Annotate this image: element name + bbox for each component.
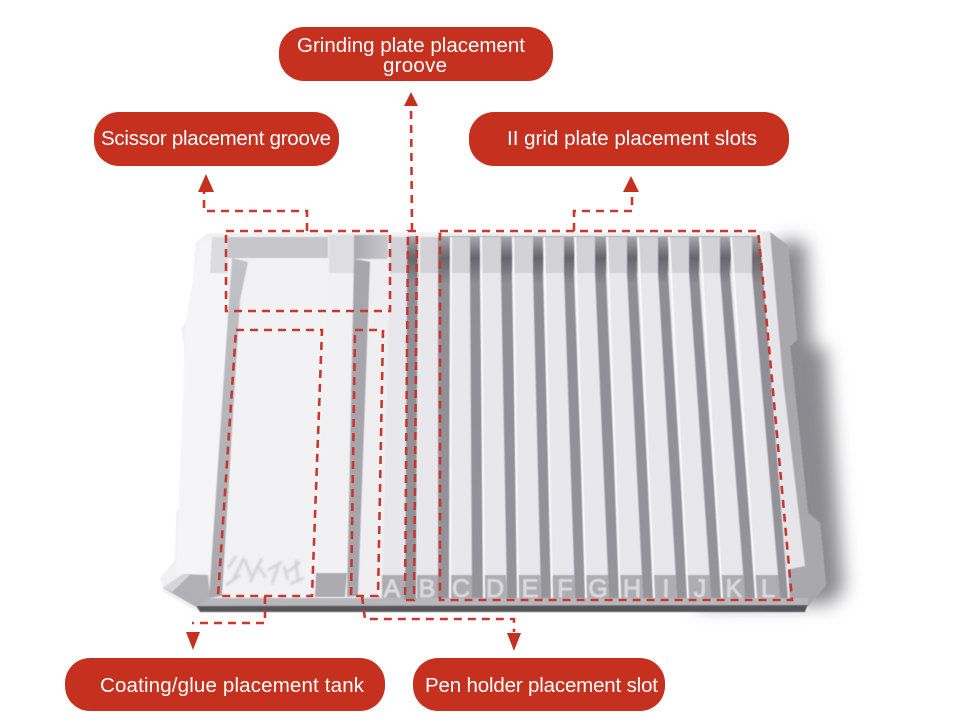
second groove dark wall xyxy=(347,259,372,597)
callout: pen holder placement slot xyxy=(351,330,665,711)
rib E xyxy=(512,273,541,598)
pill xyxy=(94,112,339,166)
grinding groove dark slot xyxy=(404,236,418,600)
leader line xyxy=(574,194,632,231)
white blocks A B C ribs xyxy=(382,237,780,598)
drop shadow of tray xyxy=(700,240,844,606)
rib B xyxy=(417,273,438,598)
tank floor bottom strip xyxy=(315,573,347,597)
slot letters: L xyxy=(761,575,775,603)
callout: II grid plate placement slots xyxy=(440,112,792,600)
pill xyxy=(279,27,553,81)
leader line xyxy=(362,596,514,632)
dashed region xyxy=(440,231,792,600)
tray xyxy=(160,231,826,612)
arrowhead xyxy=(623,176,639,192)
tray outer body xyxy=(160,231,826,611)
label: Scissor placement groove xyxy=(101,127,331,150)
pill xyxy=(413,658,665,711)
slot letters: F xyxy=(557,575,573,603)
slot letters: B xyxy=(419,575,435,603)
left groove wall xyxy=(209,258,248,598)
dashed region xyxy=(226,231,390,311)
bottom dark edge xyxy=(196,605,808,612)
divider body xyxy=(316,273,354,573)
second groove back wall xyxy=(354,235,388,259)
label: Pen holder placement slot xyxy=(425,674,658,697)
slot letters: K xyxy=(726,575,743,603)
leader line xyxy=(192,596,265,623)
slot letters: H xyxy=(623,575,641,603)
dashed region xyxy=(218,330,322,596)
arrowhead xyxy=(186,632,200,650)
scissor groove back wall xyxy=(228,237,328,258)
slot letters: A xyxy=(384,575,401,603)
slot letters xyxy=(384,575,775,603)
embossed logo mark xyxy=(226,556,304,585)
slot letters: E xyxy=(522,575,538,603)
slot letters: C xyxy=(452,575,470,603)
leader line xyxy=(204,192,307,231)
rib L xyxy=(730,273,780,598)
right side wall xyxy=(770,232,826,606)
pen holder floor xyxy=(358,258,390,597)
rib D xyxy=(480,273,507,598)
rib A xyxy=(382,273,407,598)
rib K xyxy=(699,273,745,598)
left frame strip xyxy=(176,240,232,575)
dashed region xyxy=(405,231,417,600)
grid slots dark base xyxy=(438,236,788,598)
pill xyxy=(469,112,789,166)
bottom front edge xyxy=(196,598,808,607)
slot letters: I xyxy=(663,575,669,603)
rib C xyxy=(450,273,472,598)
left bottom chamfer xyxy=(163,574,210,607)
coating tank floor xyxy=(208,258,329,598)
label: II grid plate placement slots xyxy=(507,127,757,150)
callout: grinding plate placement groove: groove xyxy=(383,54,447,77)
callout: coating/glue placement tank xyxy=(65,330,385,711)
slot letters: J xyxy=(694,575,706,603)
left bottom chamfer highlight xyxy=(163,574,190,592)
left top wall band xyxy=(210,237,228,273)
dashed region xyxy=(351,330,383,596)
rib I xyxy=(637,273,677,598)
leader line xyxy=(411,106,412,231)
label: Grinding plate placement xyxy=(297,34,525,57)
arrowhead xyxy=(404,92,418,106)
callout: scissor placement groove xyxy=(94,112,390,311)
pill xyxy=(65,658,385,711)
rib F xyxy=(543,273,575,598)
divider block top xyxy=(329,235,354,273)
arrowhead xyxy=(198,174,214,192)
arrowhead xyxy=(507,633,521,651)
slot letters: D xyxy=(486,575,504,603)
right light strip xyxy=(762,232,805,570)
slot letters: G xyxy=(588,575,608,603)
rib H xyxy=(606,273,643,598)
rib J xyxy=(668,273,711,598)
label: Coating/glue placement tank xyxy=(100,674,365,697)
rib G xyxy=(574,273,609,598)
callout: grinding plate placement groove xyxy=(279,27,553,600)
